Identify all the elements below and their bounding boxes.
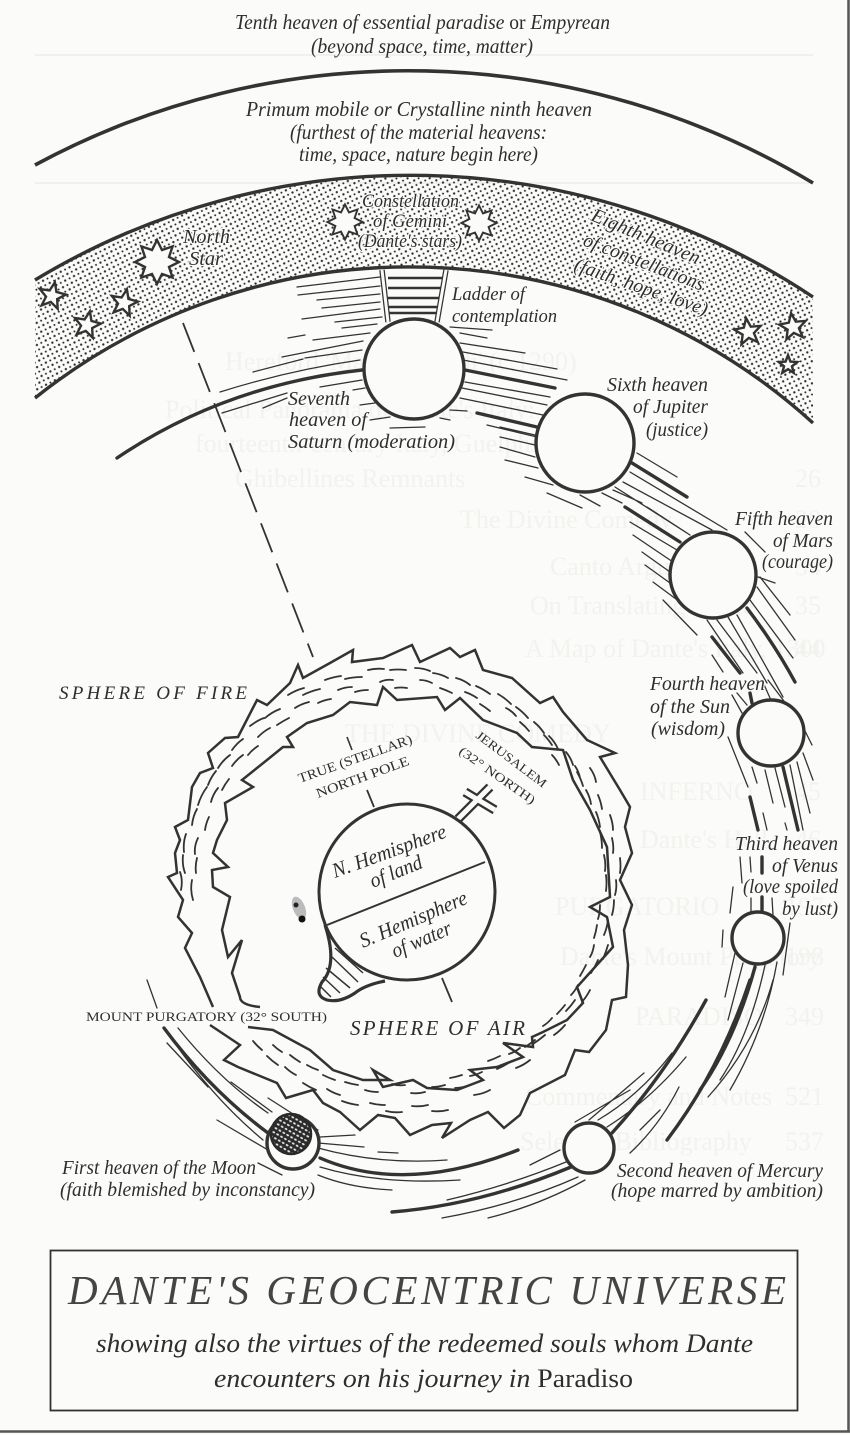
label: Jupiter: (justice) (646, 419, 708, 441)
label: Saturn: heaven of (289, 409, 369, 431)
smudge beside earth (289, 895, 309, 922)
label: primum mobile: time, space, nature begin here) (299, 142, 538, 166)
dashed axis line to North Star (183, 323, 313, 657)
label: tenth heaven (235, 10, 610, 58)
label: Venus (735, 833, 839, 920)
label: ladder of contemplation: contemplation (452, 306, 557, 327)
label: Eighth heaven: (faith, hope, love) (571, 254, 711, 320)
equator (327, 862, 485, 925)
icon: star right 3 (779, 355, 797, 373)
southern hemisphere label: S. Hemisphere (356, 886, 471, 953)
faint show-through text from the reverse page: 349 (785, 1002, 824, 1031)
faint show-through text from the reverse page: PARADISO (635, 1002, 763, 1031)
icon: star left 1 (37, 280, 68, 310)
label: Eighth heaven: Eighth heaven (587, 204, 704, 269)
ladder of contemplation (382, 270, 446, 322)
faint show-through text from the reverse page: Dante's Hell (640, 825, 768, 854)
faint show-through text from the reverse page: Dante's Mount Purgatory (560, 942, 821, 971)
label: ladder of contemplation: Ladder of (451, 284, 528, 305)
earth globe (319, 804, 495, 980)
ladder rungs (388, 278, 442, 313)
faint show-through text from the reverse page: 34 (795, 552, 821, 581)
planet: Jupiter (536, 394, 634, 492)
label: Saturn: Saturn (moderation) (288, 431, 455, 453)
arcs: eighth heaven edges (35, 175, 813, 423)
label: Moon: (faith blemished by inconstancy) (60, 1179, 315, 1201)
orbit lines: Saturn bundle (117, 277, 600, 508)
label: Constellation of Gemini: of Gemini (373, 211, 447, 232)
icon: cross of Jerusalem (458, 787, 495, 819)
icon: Gemini star right (461, 205, 497, 241)
subtitle: encounters on his journey in Paradiso (214, 1364, 633, 1393)
faint show-through text from the reverse page: The Divine Comedy (460, 505, 672, 534)
label: Jupiter: Sixth heaven (607, 374, 708, 396)
planet: Mars (670, 532, 756, 618)
label: tenth heaven: (beyond space, time, matter) (311, 34, 533, 58)
label: Constellation of Gemini (358, 191, 462, 252)
thick orbit left of Saturn (117, 370, 362, 458)
faint show-through text from the reverse page: 521 (785, 1082, 824, 1111)
label: Jerusalem: JERUSALEM (473, 728, 550, 791)
faint show-through text from the reverse page: THE DIVINE COMEDY (345, 719, 611, 748)
label: Mercury (611, 1160, 823, 1202)
faint show-through text from the reverse page: Political Panorama of Dante's Italy: (165, 395, 535, 424)
orbit lines: Sun to Venus bundle (722, 737, 813, 975)
planet: Mercury (564, 1123, 614, 1173)
panel: eighth heaven stippled band (35, 175, 813, 423)
flame outer edge (168, 645, 632, 1138)
faint show-through text from the reverse page (35, 55, 826, 1156)
label: Mercury: (hope marred by ambition) (611, 1180, 823, 1202)
label: Venus: (love spoiled (743, 876, 839, 898)
faint show-through text from the reverse page: Selected Bibliography (520, 1127, 752, 1156)
icon: star left 2 (72, 309, 103, 339)
label: primum mobile (245, 97, 592, 166)
flame inner edge (212, 687, 613, 1090)
orbit lines: Mercury to Moon bundle (147, 980, 585, 1218)
icon: star left 3 (109, 287, 140, 317)
faint show-through text from the reverse page: On Translating Dante (530, 591, 754, 620)
orbit lines: Mars to Sun bundle (707, 577, 812, 745)
moon dark face (271, 1114, 311, 1154)
label: primum mobile: Primum mobile or Crystalline ninth heaven (245, 97, 592, 121)
arc: primum mobile outer boundary (35, 71, 813, 183)
label: Sun: of the Sun (650, 696, 730, 718)
title: DANTE'S GEOCENTRIC UNIVERSE (67, 1267, 786, 1313)
planet: Sun (738, 700, 804, 766)
label: Eighth heaven: of constellations (580, 229, 708, 296)
faint show-through text from the reverse page: 26 (795, 464, 821, 493)
label: Eighth heaven (571, 204, 711, 320)
faint show-through text from the reverse page: Canto Arguments (550, 552, 732, 581)
icon: North Star (135, 240, 179, 284)
subtitle: showing also the virtues of the redeemed souls whom Dante (96, 1329, 753, 1358)
label: Jerusalem (456, 728, 550, 807)
label: Mars: Fifth heaven (734, 508, 833, 530)
title box (50, 1250, 798, 1410)
faint show-through text from the reverse page: INFERNO (640, 777, 753, 806)
faint show-through text from the reverse page: 197 (785, 892, 824, 921)
stars of the eighth heaven (37, 204, 808, 373)
label: Moon: First heaven of the Moon (61, 1157, 256, 1179)
label: North Star (182, 226, 230, 270)
planet: Saturn (364, 319, 464, 419)
label: Moon (60, 1157, 315, 1201)
label: Sun: Fourth heaven (649, 673, 765, 695)
icon: star right 1 (733, 316, 763, 345)
axis tick above label (347, 737, 352, 750)
label: Constellation of Gemini: Constellation (362, 191, 459, 212)
northern hemisphere label: N. Hemisphere (328, 819, 449, 883)
faint show-through text from the reverse page: 44 (795, 634, 821, 663)
label: Saturn: Seventh (288, 388, 350, 410)
label: North Star: North (182, 226, 230, 248)
label: sphere of air: SPHERE OF AIR (350, 1016, 525, 1040)
flame inner strokes (180, 668, 620, 1112)
icon: Gemini star left (327, 204, 363, 240)
faint show-through text from the reverse page: 537 (785, 1127, 824, 1156)
label: sphere of fire: SPHERE OF FIRE (59, 683, 247, 704)
label: ladder of contemplation (451, 284, 557, 327)
northern hemisphere label: of land (366, 850, 426, 893)
southern hemisphere label: of water (388, 916, 456, 963)
label: tenth heaven: Tenth heaven of essential paradise or Empyrean (235, 10, 610, 34)
label: Jupiter (607, 374, 708, 441)
faint show-through text from the reverse page: A Map of Dante's Italy, 1300 (525, 634, 826, 663)
label: Mars: of Mars (773, 530, 833, 552)
label: mount purgatory: MOUNT PURGATORY (32° SOUTH) (86, 1010, 327, 1024)
label: Mars (734, 508, 833, 573)
label: Venus: by lust) (782, 898, 838, 920)
faint show-through text from the reverse page: 35 (795, 591, 821, 620)
faint show-through text from the reverse page: 45 (795, 777, 821, 806)
planet: Moon (267, 1114, 319, 1169)
faint show-through text from the reverse page: 28 (795, 505, 821, 534)
ladder rails (382, 270, 446, 322)
label: true north pole: NORTH POLE (314, 753, 411, 801)
flame ring: sphere of fire (168, 645, 632, 1138)
label: Venus: Third heaven (735, 833, 838, 855)
orbit lines: Jupiter to Mars bundle (602, 453, 775, 635)
faint show-through text from the reverse page: Hereford 'Mappa Mundi' (c.1290) (225, 347, 577, 376)
faint show-through text from the reverse page: PURGATORIO (555, 892, 719, 921)
faint show-through text from the reverse page: 46 (795, 825, 821, 854)
faint show-through text from the reverse page: Commentary and Notes (525, 1082, 772, 1111)
planet: Venus (732, 912, 784, 964)
mountain hatching (321, 948, 363, 997)
label: Venus: of Venus (772, 855, 838, 877)
label: true north pole: TRUE (STELLAR) (296, 732, 414, 786)
orbit lines: Venus to Mercury bundle (575, 953, 777, 1153)
mount purgatory (319, 925, 385, 1001)
faint show-through text from the reverse page: 198 (785, 942, 824, 971)
label: Saturn (288, 388, 455, 453)
mountain outline (319, 925, 385, 1001)
label: Mercury: Second heaven of Mercury (617, 1160, 823, 1182)
label: true north pole (296, 732, 414, 801)
label: Jerusalem: (32° NORTH) (456, 744, 538, 807)
ticks: earth axis (367, 790, 452, 1002)
subtitle (96, 1329, 753, 1393)
label: Sun (649, 673, 765, 740)
faint show-through text from the reverse page: Ghibellines Remnants (235, 464, 465, 493)
label: primum mobile: (furthest of the material heavens: (290, 120, 547, 144)
label: Jupiter: of Jupiter (633, 396, 708, 418)
label: North Star: Star (189, 248, 223, 270)
faint show-through text from the reverse page: fourteenth-century Italy, Guelphs and (195, 429, 585, 458)
icon: star right 2 (778, 311, 808, 340)
label: Mars: (courage) (762, 551, 833, 573)
label: Constellation of Gemini: (Dante's stars) (358, 231, 462, 252)
label: Sun: (wisdom) (651, 718, 725, 740)
